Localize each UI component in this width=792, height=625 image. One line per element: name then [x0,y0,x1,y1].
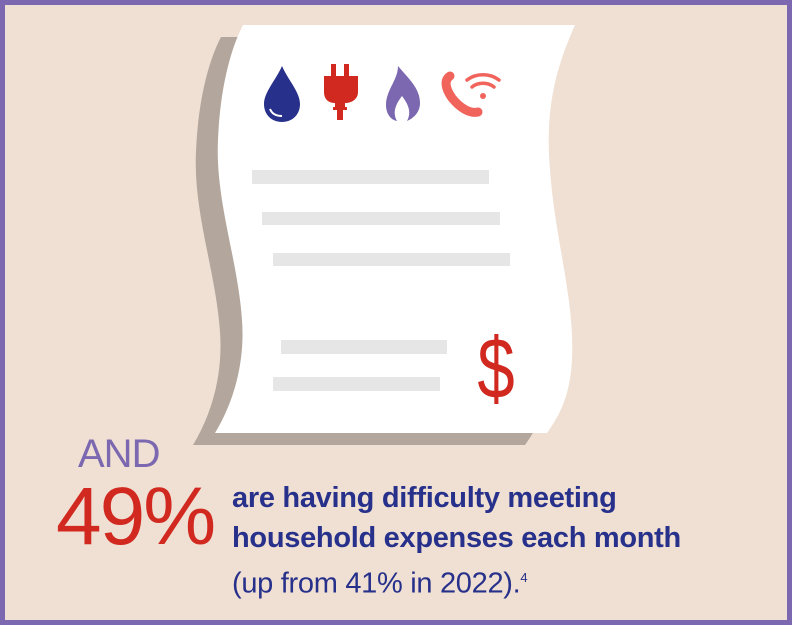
paper shadow [193,37,553,445]
text lines [252,170,510,391]
icon: water drop [264,66,300,122]
description: are having difficulty meeting [232,482,616,514]
description [232,482,681,600]
icon: flame [386,66,420,121]
paper [215,25,575,433]
icon: plug [324,64,358,120]
dollar sign: $ [477,321,515,417]
description: (up from 41% in 2022).4 [232,568,527,600]
description: household expenses each month [232,522,681,554]
49% stat: 49% [56,471,214,562]
icon: phone wifi [446,75,499,112]
AND label: AND [78,432,159,476]
